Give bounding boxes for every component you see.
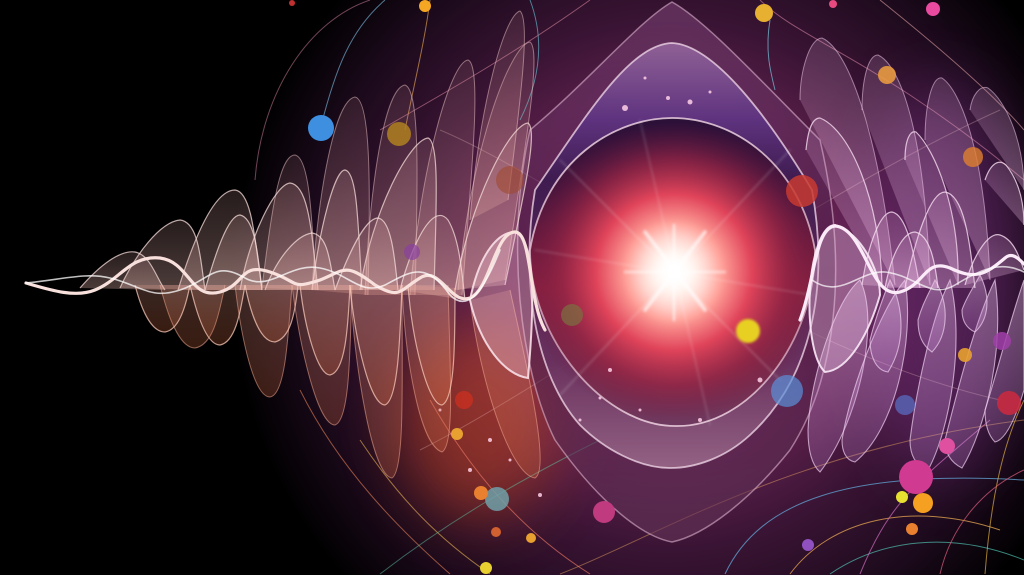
right wave: upper back lobes: [800, 38, 1024, 285]
right wave: lower lobes: [808, 275, 1024, 472]
left wave: lower front lobes: [135, 285, 455, 405]
left wave: upper back lobes: [262, 11, 534, 295]
left wave: bright central lobe: [470, 232, 532, 378]
thin orbit threads: [255, 0, 1024, 574]
glowing core: [524, 120, 824, 425]
right wave: central ribbon: [800, 226, 1024, 320]
nested wave rings around core: [518, 2, 836, 542]
inner ring: [530, 118, 815, 426]
sparkles: [438, 76, 762, 497]
left wave: central ribbon: [26, 232, 545, 330]
outer ring: [518, 2, 836, 542]
left wave: upper front lobes: [80, 123, 531, 300]
middle ring: [529, 43, 818, 468]
right wave: upper front lobes: [806, 118, 1024, 288]
right wave: bright central lobe: [810, 225, 880, 372]
coloured particles: [289, 0, 1021, 574]
background nebula glow: [230, 0, 1024, 575]
left wave: lower back lobes: [160, 285, 540, 478]
star flare: [535, 120, 812, 425]
